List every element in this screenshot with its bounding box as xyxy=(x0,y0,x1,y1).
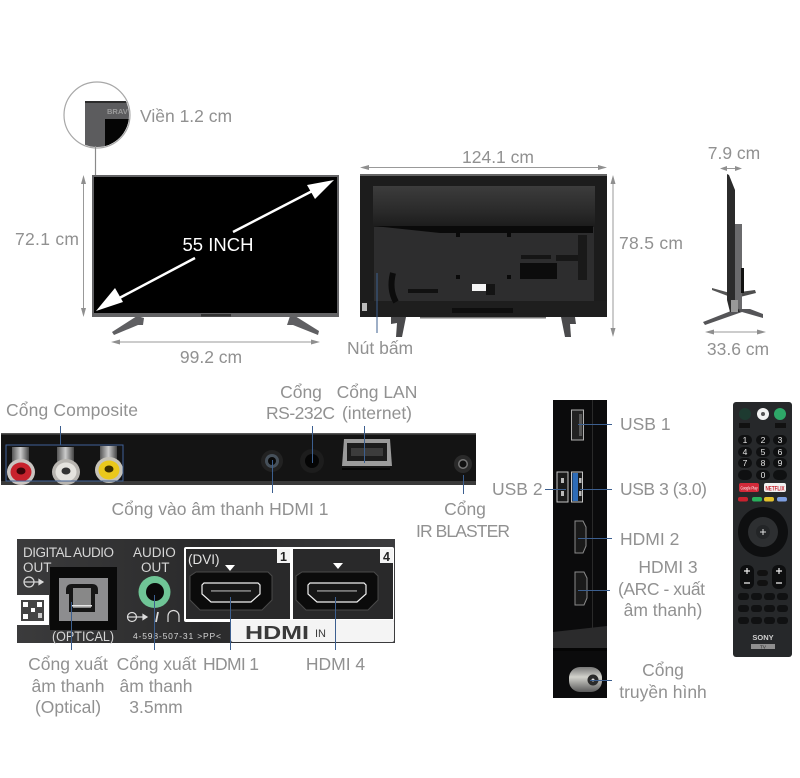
headphone symbols xyxy=(127,610,179,622)
RCA white xyxy=(52,447,80,485)
label: HDMI 4: HDMI 4 xyxy=(306,654,365,674)
depth arrow xyxy=(720,166,742,171)
TV badge xyxy=(751,644,775,650)
USB 3 port xyxy=(572,472,582,502)
transport buttons xyxy=(738,593,788,624)
HDMI 1 port xyxy=(190,572,272,610)
USB 1 port xyxy=(572,410,584,440)
service buttons xyxy=(739,483,786,492)
bezel zoom circle icon: BRAV xyxy=(107,107,128,116)
white HDMI frame: (DVI) xyxy=(188,552,220,567)
RCA red xyxy=(7,447,35,485)
remote brand: SONY xyxy=(752,633,774,642)
colour buttons xyxy=(738,497,787,502)
label: side depth: 7.9 cm xyxy=(708,143,760,163)
panel print text: (OPTICAL) xyxy=(52,628,114,644)
label: screen size: 55 INCH xyxy=(183,234,253,255)
label: LAN: Cổng LAN xyxy=(337,382,417,402)
label: USB 2: USB 2 xyxy=(492,479,543,499)
HDMI 4 port xyxy=(296,572,378,610)
number labels: 4 xyxy=(743,447,748,457)
number labels: 0 xyxy=(761,470,766,480)
white HDMI frame: 4 xyxy=(383,550,390,564)
label: rear width: 124.1 cm xyxy=(462,147,534,167)
HDMI 2 port xyxy=(575,521,586,553)
label: front height: 72.1 cm xyxy=(15,229,79,249)
label: HDMI 3: (ARC - xuất xyxy=(618,579,705,599)
side view TV xyxy=(703,174,763,325)
white HDMI frame: IN xyxy=(315,628,326,640)
d-pad xyxy=(738,507,788,557)
number labels xyxy=(743,435,783,480)
label: optical: Cổng xuất xyxy=(28,654,108,674)
QR code block xyxy=(17,595,49,625)
bezel zoom circle icon xyxy=(64,82,135,176)
width arrow rear xyxy=(360,165,607,170)
height arrow rear xyxy=(610,175,616,337)
label: HDMI 3: âm thanh) xyxy=(624,600,702,620)
number labels: 9 xyxy=(778,458,783,468)
label: IR blaster: Cổng xyxy=(444,499,486,519)
label: rear height: 78.5 cm xyxy=(619,233,683,253)
label: LAN: (internet) xyxy=(342,403,412,423)
height arrow front xyxy=(81,175,86,317)
number labels: 3 xyxy=(778,435,783,445)
number labels: 8 xyxy=(761,458,766,468)
rear TV xyxy=(360,174,607,337)
label: IR blaster: IR BLASTER xyxy=(416,521,510,541)
label: USB 1: USB 1 xyxy=(620,414,671,434)
audio HDMI panel xyxy=(17,539,395,644)
number labels: 5 xyxy=(761,447,766,457)
label: HDMI 1 audio in: Cổng vào âm thanh HDMI 1 xyxy=(112,499,328,519)
label: HDMI 1: HDMI 1 xyxy=(203,654,259,674)
width arrow stand xyxy=(111,340,320,344)
label: 3.5mm: âm thanh xyxy=(120,676,192,696)
base arrow xyxy=(705,330,766,334)
label: stand width: 99.2 cm xyxy=(180,347,242,367)
service buttons: NETFLIX xyxy=(766,486,784,492)
HDMI 3 port xyxy=(575,572,587,605)
panel print text xyxy=(23,545,221,644)
label: button: Nút bấm xyxy=(347,338,413,358)
LAN port xyxy=(342,439,392,470)
panel print text: OUT xyxy=(141,560,170,575)
panel print text: AUDIO xyxy=(133,545,176,560)
diagonal arrow xyxy=(96,180,334,311)
optical port xyxy=(50,567,117,630)
front TV xyxy=(92,175,339,335)
TV badge: TV xyxy=(760,644,766,650)
number labels: 1 xyxy=(743,435,748,445)
volume and programme pills xyxy=(740,565,786,589)
label: 3.5mm: 3.5mm xyxy=(129,697,183,717)
label: composite: Cổng Composite xyxy=(6,400,138,420)
label: bezel: Viền 1.2 cm xyxy=(140,106,232,126)
audio jack xyxy=(261,450,283,472)
white HDMI frame: HDMI xyxy=(245,623,309,643)
side ports panel xyxy=(553,400,607,698)
leader: button xyxy=(376,273,378,333)
label: optical: âm thanh xyxy=(32,676,104,696)
audio out jack xyxy=(138,576,170,608)
service buttons: Google Play xyxy=(740,486,758,490)
optical out symbol xyxy=(24,577,43,587)
composite highlight box xyxy=(6,445,123,481)
white HDMI frame xyxy=(184,547,394,643)
label: HDMI 3: HDMI 3 xyxy=(638,557,698,577)
label: HDMI 2: HDMI 2 xyxy=(620,529,679,549)
top buttons xyxy=(739,408,786,428)
label: RS-232C: RS-232C xyxy=(266,403,335,423)
remote control xyxy=(733,402,792,657)
leaders: port strip xyxy=(60,426,464,494)
label: base depth: 33.6 cm xyxy=(707,339,769,359)
panel print text: 4-598-507-31 >PP< xyxy=(133,631,221,641)
label: optical: (Optical) xyxy=(35,697,101,717)
RCA yellow xyxy=(95,446,123,483)
label: RS-232C: Cổng xyxy=(280,382,322,402)
label: USB 3: USB 3 (3.0) xyxy=(620,479,707,499)
white HDMI frame: 1 xyxy=(280,550,287,564)
number labels: 7 xyxy=(743,458,748,468)
label: antenna: Cổng xyxy=(642,660,684,680)
antenna port xyxy=(569,667,602,692)
USB 2 port xyxy=(557,472,568,502)
leaders: side ports xyxy=(545,424,612,680)
number labels: 6 xyxy=(778,447,783,457)
panel print text: DIGITAL AUDIO xyxy=(23,545,114,560)
number labels: 2 xyxy=(761,435,766,445)
label: 3.5mm: Cổng xuất xyxy=(117,654,197,674)
port strip xyxy=(1,433,476,485)
panel print text: OUT xyxy=(23,560,52,575)
leaders: audio HDMI panel xyxy=(72,595,336,650)
number pad xyxy=(738,435,787,480)
IR jack xyxy=(454,455,472,473)
RS-232C jack xyxy=(300,449,324,473)
label: antenna: truyền hình xyxy=(619,682,707,702)
